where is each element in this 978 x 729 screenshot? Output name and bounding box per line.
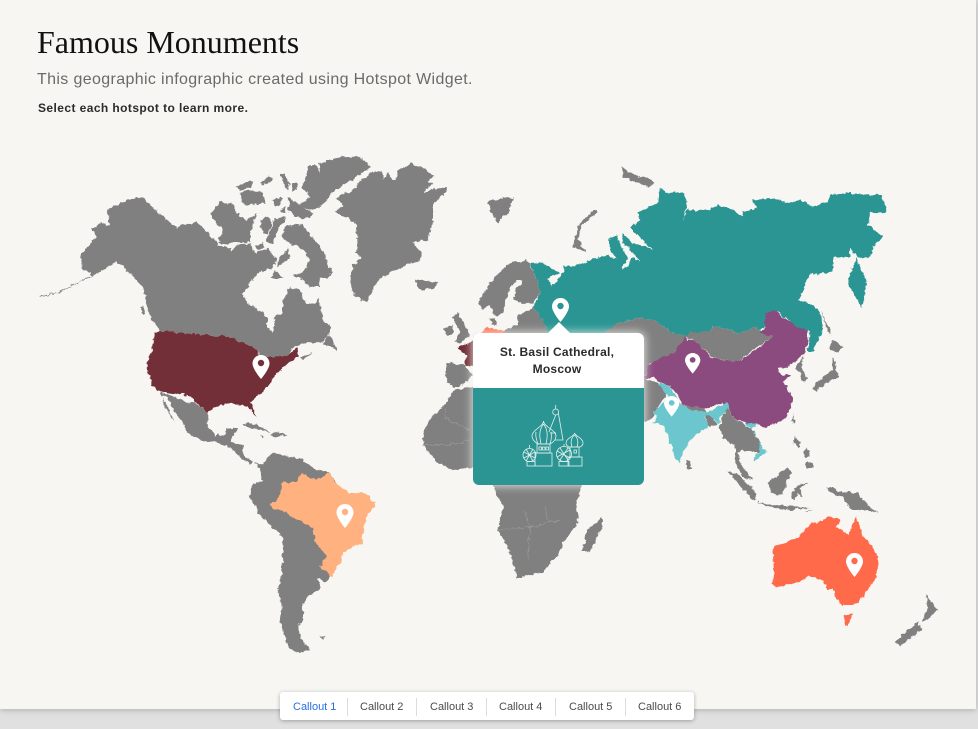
- region: South America: [250, 453, 350, 653]
- region: USA: [147, 331, 298, 417]
- region: India: [653, 382, 730, 464]
- hotspot pin: Brazil: [336, 504, 354, 528]
- tab: Callout 3: Callout 3: [430, 701, 473, 713]
- region: Maritime Southeast Asia: [728, 414, 878, 514]
- region: Central Asia and Middle East: [600, 318, 772, 421]
- tab: Callout 1: Callout 1: [293, 701, 336, 713]
- region: Mexico, Central America and Caribbean: [160, 392, 287, 465]
- title: Famous Monuments: [37, 24, 299, 60]
- region: China: [645, 311, 808, 428]
- region: Greenland and Iceland: [335, 164, 448, 302]
- region: France: [457, 339, 475, 368]
- subtitle: This geographic infographic created using Hotspot Widget.: [37, 71, 473, 88]
- tab: Callout 4: Callout 4: [499, 701, 542, 713]
- land masses: [38, 156, 937, 653]
- callout heading: [473, 333, 644, 388]
- hotspot pin: Moscow: [552, 298, 569, 322]
- tab bar: [280, 692, 694, 720]
- region: Russian Arctic islands: [573, 167, 655, 252]
- region: Brazil: [270, 473, 376, 577]
- instruction text: Select each hotspot to learn more.: [38, 101, 248, 115]
- callout arrow: [548, 322, 570, 333]
- region: Vietnam: [745, 423, 766, 462]
- hotspot pin: China: [685, 353, 700, 374]
- tab: Callout 5: Callout 5: [569, 701, 612, 713]
- region: Korea, Japan and Sakhalin: [795, 310, 843, 393]
- region: South and Southeast Asia: [678, 402, 760, 480]
- tab: Callout 6: Callout 6: [638, 701, 681, 713]
- callout card: St. Basil Cathedral: [473, 333, 644, 485]
- hotspot pin: India: [664, 396, 679, 417]
- icon: St. Basil Cathedral: [522, 405, 584, 466]
- hotspot pin: USA: [252, 355, 270, 379]
- region: Germany: [478, 326, 506, 335]
- hotspot pin: Australia: [846, 553, 863, 577]
- region: Australia: [772, 516, 879, 625]
- callout heading: Moscow: [533, 362, 581, 376]
- region: Russia: [530, 188, 887, 352]
- tab: Callout 2: Callout 2: [360, 701, 403, 713]
- region: Africa: [423, 385, 603, 578]
- region: Europe: [443, 198, 548, 387]
- region: North America, Canada and Alaska: [38, 156, 371, 360]
- region: New Zealand: [895, 595, 937, 646]
- callout heading: St. Basil Cathedral,: [500, 345, 614, 359]
